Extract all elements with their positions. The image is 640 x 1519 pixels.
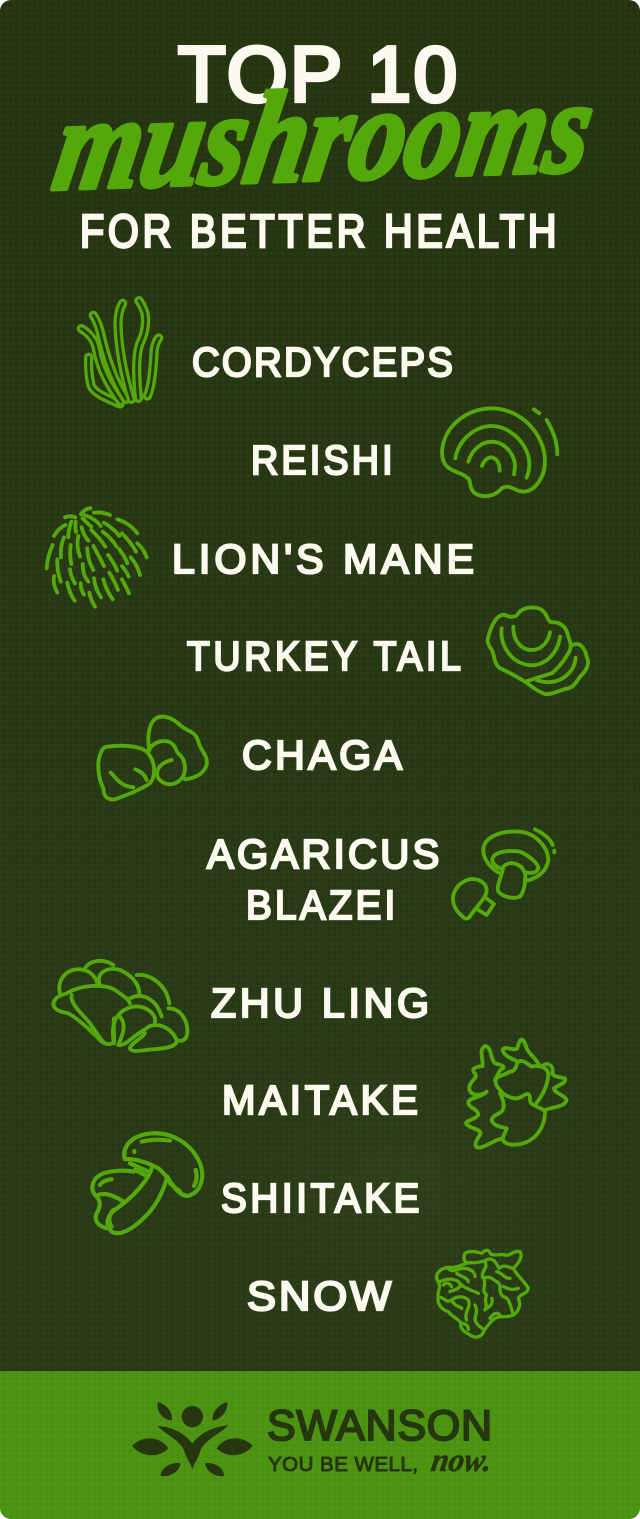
icon: agaricus blazei xyxy=(453,829,554,919)
list item: Snow: SNOW xyxy=(247,1273,391,1319)
logo: Swanson leaf figure xyxy=(132,1402,253,1476)
list item: Reishi: REISHI xyxy=(251,438,393,483)
logo: tagline script: now. xyxy=(429,1442,495,1479)
list item: Lion's Mane: LION'S MANE xyxy=(172,536,474,582)
icon: lion's mane xyxy=(47,508,147,607)
list item: Chaga: CHAGA xyxy=(242,732,403,778)
list item: Cordyceps: CORDYCEPS xyxy=(192,340,453,385)
logo: tagline: YOU BE WELL, xyxy=(268,1453,418,1476)
icon: reishi xyxy=(442,408,557,496)
title: Top 10: TOP 10 xyxy=(178,30,457,118)
icon: maitake xyxy=(466,1040,567,1148)
list item: Zhu Ling: ZHU LING xyxy=(211,980,429,1026)
panel: footer band xyxy=(0,1371,640,1519)
list item: Shiitake: SHIITAKE xyxy=(221,1176,419,1221)
icon: shiitake xyxy=(92,1133,202,1233)
icon: cordyceps xyxy=(81,301,159,404)
logo: Swanson wordmark: SWANSON xyxy=(267,1402,492,1450)
name line 1: AGARICUS xyxy=(207,831,439,877)
icon: turkey tail xyxy=(488,607,588,694)
icon: zhu ling xyxy=(53,961,187,1051)
icon: snow mushroom xyxy=(437,1250,528,1337)
icon: chaga xyxy=(98,717,207,800)
subtitle: FOR BETTER HEALTH xyxy=(80,206,556,258)
list item: Agaricus Blazei xyxy=(207,831,439,928)
name line 2: BLAZEI xyxy=(246,883,395,928)
list item: Maitake: MAITAKE xyxy=(222,1077,418,1123)
list item: Turkey Tail: TURKEY TAIL xyxy=(187,634,461,679)
